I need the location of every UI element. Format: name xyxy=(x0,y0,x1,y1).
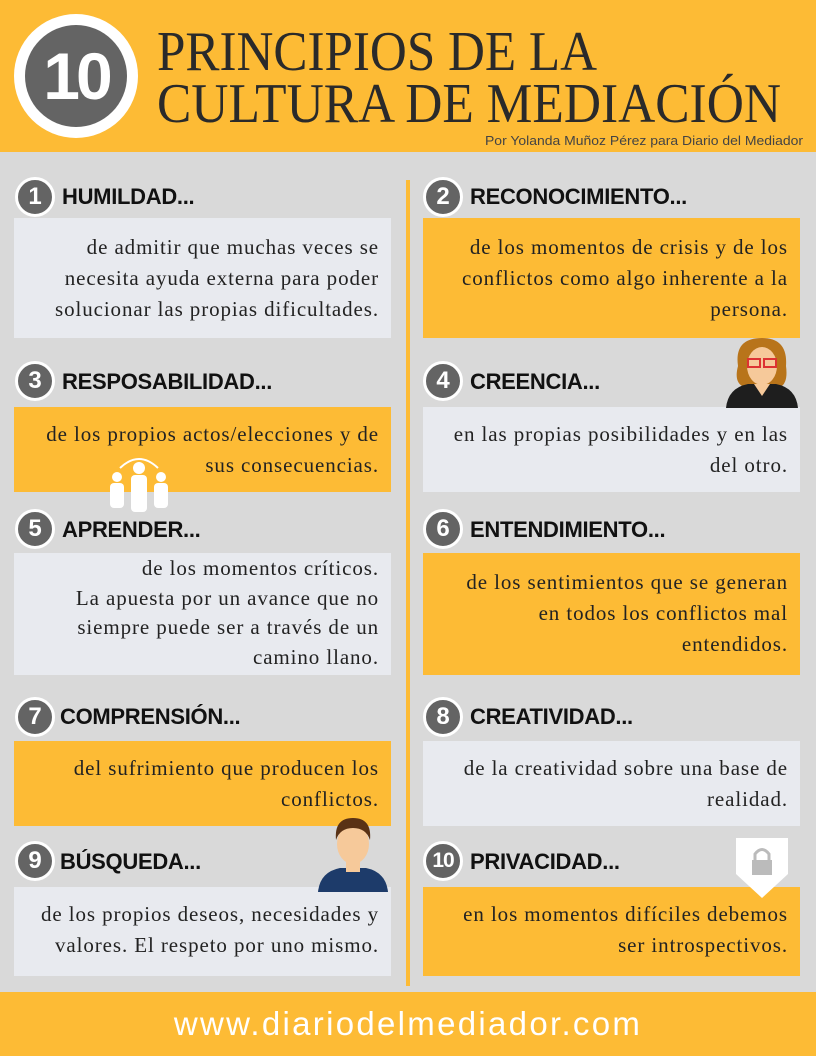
item 7: COMPRENSIÓN... xyxy=(60,704,240,729)
icon: people group xyxy=(110,458,168,512)
item 1: 1 xyxy=(28,183,42,210)
item 5: APRENDER... xyxy=(62,517,200,542)
center divider xyxy=(406,180,410,986)
item 6: 6 xyxy=(436,515,450,542)
item 6: entendidos. xyxy=(682,632,788,656)
item 9 xyxy=(14,818,391,976)
footer: www.diariodelmediador.com xyxy=(174,1005,642,1042)
item 7: conflictos. xyxy=(281,787,379,811)
item 8: de la creatividad sobre una base de xyxy=(464,756,788,780)
header band xyxy=(0,0,816,152)
item 10: PRIVACIDAD... xyxy=(470,849,620,874)
item 10: ser introspectivos. xyxy=(618,933,788,957)
item 9: valores. El respeto por uno mismo. xyxy=(55,933,379,957)
item 9: BÚSQUEDA... xyxy=(60,849,201,874)
item 5 xyxy=(14,509,391,675)
item 8: realidad. xyxy=(707,787,788,811)
item 3: de los propios actos/elecciones y de xyxy=(46,422,379,446)
logo circle 10 xyxy=(14,14,138,138)
item 7: del sufrimiento que producen los xyxy=(74,756,379,780)
item 4 xyxy=(423,338,800,492)
item 3: 3 xyxy=(28,367,42,394)
item 1 xyxy=(14,177,391,338)
item 2: de los momentos de crisis y de los xyxy=(470,235,788,259)
item 6: en todos los conflictos mal xyxy=(539,601,788,625)
item 3: sus consecuencias. xyxy=(205,453,379,477)
item 5: La apuesta por un avance que no xyxy=(76,586,379,610)
item 4: CREENCIA... xyxy=(470,369,600,394)
item 4: del otro. xyxy=(710,453,788,477)
title xyxy=(157,21,804,148)
title: CULTURA DE MEDIACIÓN xyxy=(157,72,781,135)
item 10: 10 xyxy=(432,849,454,872)
item 5: camino llano. xyxy=(253,644,379,668)
item 8: CREATIVIDAD... xyxy=(470,704,633,729)
item 7 xyxy=(14,697,391,826)
item 2 xyxy=(423,177,800,338)
item 2: 2 xyxy=(436,183,450,210)
item 4: en las propias posibilidades y en las xyxy=(454,422,788,446)
logo circle 10: 10 xyxy=(43,39,109,113)
icon: man avatar xyxy=(318,818,388,892)
item 5: de los momentos críticos. xyxy=(142,556,379,580)
item 5: siempre puede ser a través de un xyxy=(77,615,379,639)
item 9: 9 xyxy=(28,847,42,874)
title: Por Yolanda Muñoz Pérez para Diario del Mediador xyxy=(485,133,804,148)
item 1: HUMILDAD... xyxy=(62,184,194,209)
item 9: de los propios deseos, necesidades y xyxy=(41,902,379,926)
item 4: 4 xyxy=(436,367,450,394)
item 5: 5 xyxy=(28,515,42,542)
item 3: RESPOSABILIDAD... xyxy=(62,369,272,394)
item 6: de los sentimientos que se generan xyxy=(466,570,788,594)
item 2: RECONOCIMIENTO... xyxy=(470,184,687,209)
item 8: 8 xyxy=(436,703,450,730)
icon: lock shield xyxy=(736,838,788,898)
item 7: 7 xyxy=(28,703,42,730)
item 2: conflictos como algo inherente a la xyxy=(462,266,788,290)
item 6: ENTENDIMIENTO... xyxy=(470,517,665,542)
title: PRINCIPIOS DE LA xyxy=(157,21,598,83)
icon: woman with glasses xyxy=(726,338,798,408)
item 1: de admitir que muchas veces se xyxy=(87,235,379,259)
item 10 xyxy=(423,838,800,976)
item 1: necesita ayuda externa para poder xyxy=(65,266,379,290)
item 2: persona. xyxy=(710,297,788,321)
item 1: solucionar las propias dificultades. xyxy=(55,297,379,321)
item 3 xyxy=(14,361,391,512)
item 10: en los momentos difíciles debemos xyxy=(463,902,788,926)
item 6 xyxy=(423,509,800,675)
item 8 xyxy=(423,697,800,826)
footer xyxy=(0,992,816,1056)
